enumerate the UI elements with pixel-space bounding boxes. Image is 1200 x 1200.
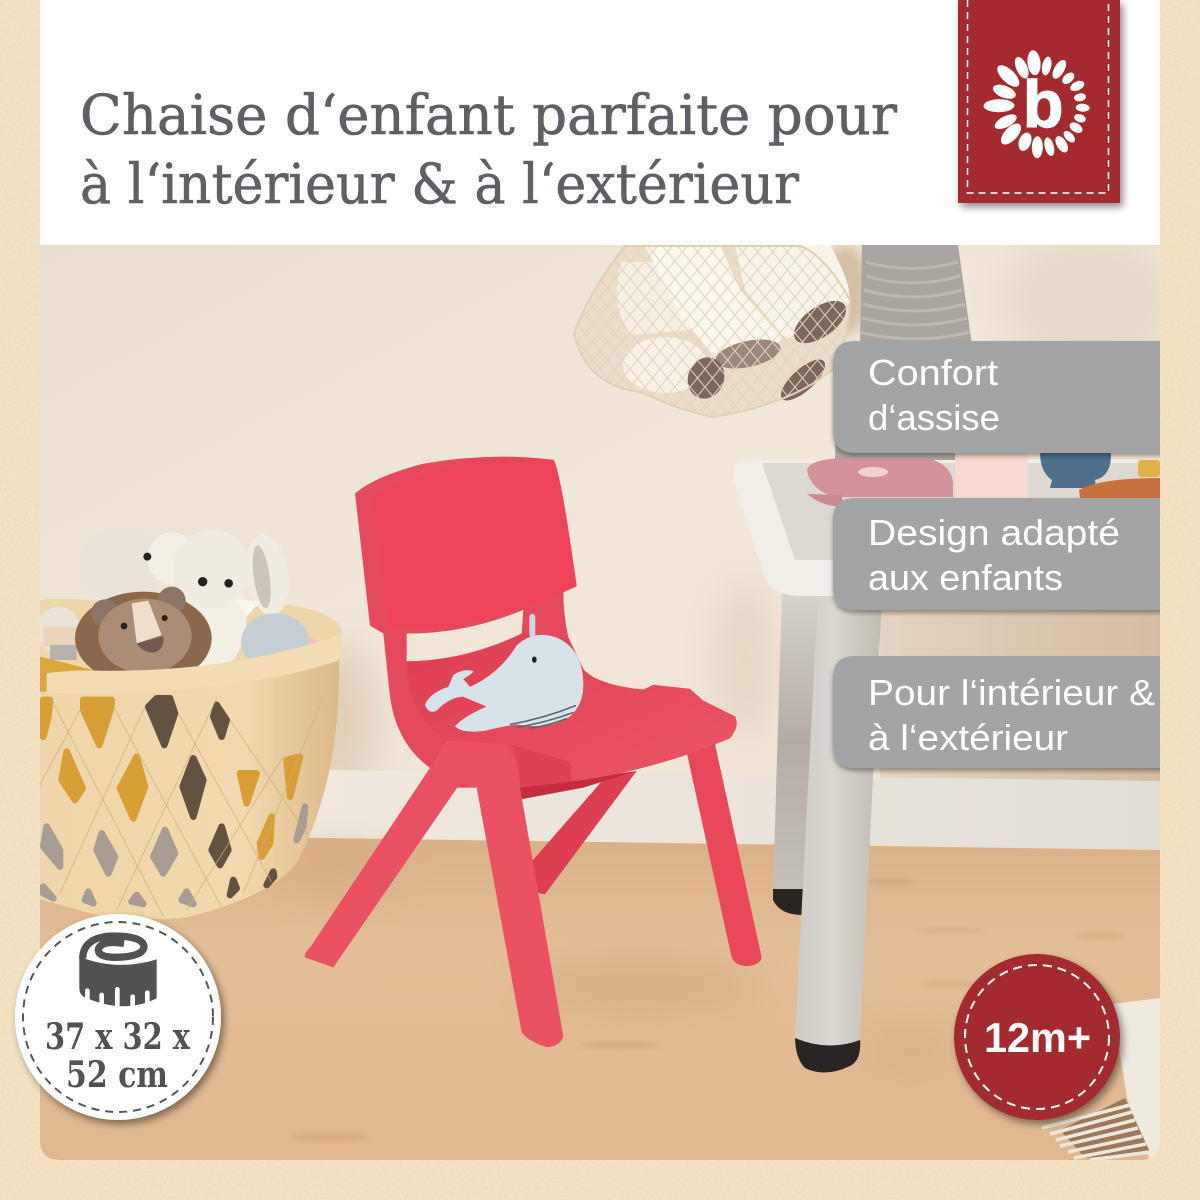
callout: Pour l'intérieur & à l'extérieur: à l‘extérieur (868, 717, 1068, 758)
icon: measuring tape (79, 936, 157, 1017)
brand tag logo (958, 0, 1120, 203)
callout: Confort d'assise: d‘assise (868, 397, 1000, 438)
floor grain (290, 878, 1125, 1141)
floor shadows (310, 832, 730, 1006)
basket body (30, 657, 339, 919)
panel: lifestyle photo (30, 230, 1180, 1160)
front legs (305, 740, 563, 1047)
red chair (305, 457, 762, 1047)
plush lion (75, 586, 212, 671)
badge: dimensions (15, 914, 221, 1120)
plush blue whale (241, 613, 318, 659)
rug (1042, 998, 1160, 1160)
dimensions text (45, 1016, 190, 1096)
pale pink cup (955, 452, 1028, 499)
callout: Pour l'intérieur & à l'extérieur: Pour l‘intérieur & (868, 672, 1155, 713)
basket front rim (47, 634, 342, 693)
callout: Design adapté aux enfants: aux enfants (868, 557, 1063, 598)
white header band (40, 0, 1160, 245)
pink plate (807, 458, 953, 497)
logo letter: b (1023, 67, 1063, 141)
title: Chaise d‘enfant parfaite pour (80, 83, 898, 147)
title (80, 83, 898, 216)
plush elephant (177, 530, 288, 666)
plush whale (425, 614, 583, 732)
wall shadows (300, 230, 1180, 800)
towel hanging (835, 245, 972, 460)
wooden floor (40, 834, 1160, 1160)
wall (40, 245, 1160, 845)
callout: Design adapté aux enfants (833, 498, 1170, 610)
basket back rim (40, 598, 342, 671)
dimensions text: 37 x 32 x (45, 1016, 190, 1058)
seat and back shell (355, 457, 737, 788)
seat front corner (510, 744, 572, 788)
yellow cup (1138, 460, 1160, 477)
tabletop (733, 460, 1160, 596)
rear table leg (773, 590, 818, 893)
blue cup (1040, 452, 1111, 488)
plush parts (617, 245, 853, 407)
rear right leg (687, 744, 762, 966)
seat surface (407, 634, 737, 782)
basket strip edges (30, 697, 323, 917)
table (733, 452, 1160, 1073)
callout: Confort d'assise (833, 341, 1170, 453)
net bag with plush (574, 245, 853, 417)
backrest face (372, 459, 577, 629)
blanket over rim (40, 657, 93, 692)
under seat (520, 771, 637, 799)
badge: age 12m+: 12m+ (984, 1014, 1091, 1061)
basket openings (43, 700, 300, 857)
title: à l‘intérieur & à l‘extérieur (80, 152, 800, 216)
backrest opening (407, 610, 523, 661)
callout: Confort d'assise: Confort (868, 352, 998, 393)
icon: flower petals (983, 50, 1090, 158)
front table leg (795, 595, 882, 1046)
rear inner strut (531, 771, 637, 894)
plush sheep (143, 532, 187, 584)
dimensions text: 52 cm (66, 1054, 168, 1096)
callout: Pour l'intérieur & à l'extérieur (833, 656, 1170, 768)
baseboard (318, 770, 1160, 851)
orange plate (1079, 478, 1160, 498)
small toys (40, 606, 79, 660)
basket with plush toys (30, 527, 342, 919)
front table foot (795, 1036, 860, 1073)
callout: Design adapté aux enfants: Design adapté (868, 512, 1120, 553)
badge: age 12m+ (954, 954, 1120, 1120)
